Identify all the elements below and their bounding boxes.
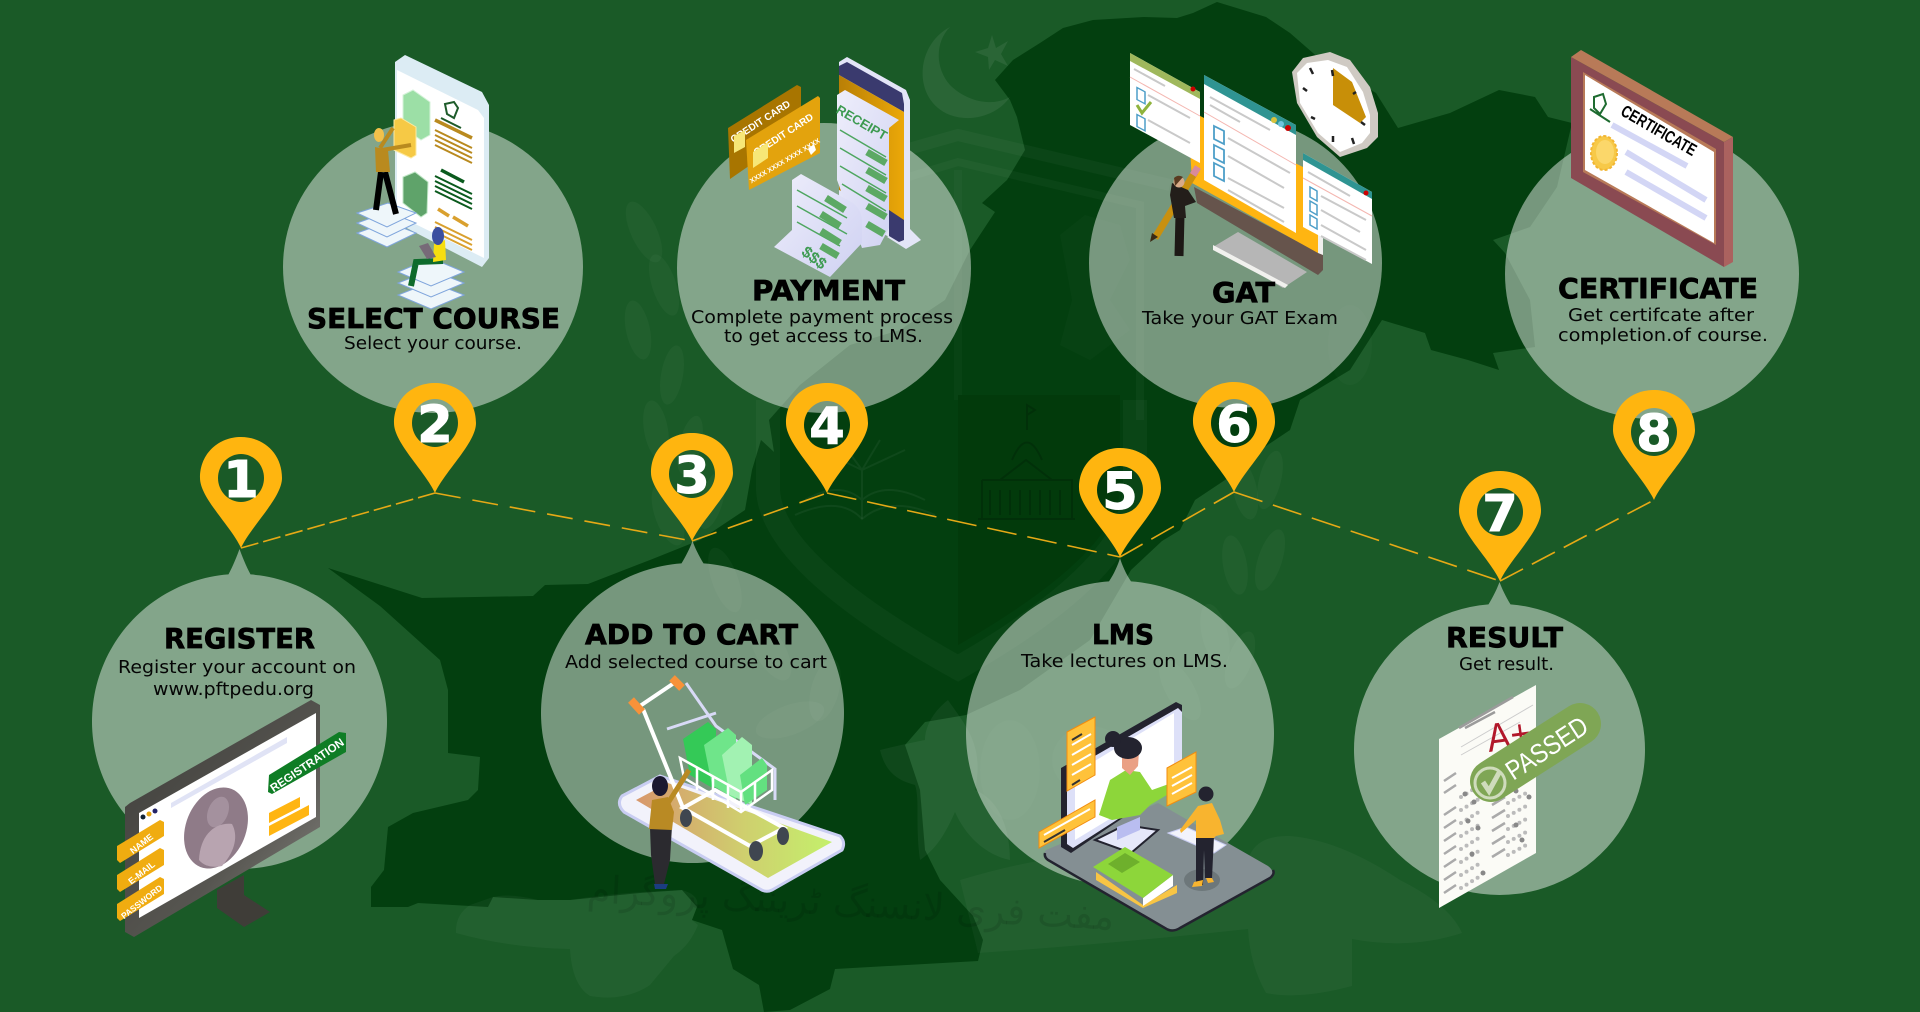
pencil bbox=[1150, 167, 1198, 242]
phone body bbox=[839, 57, 910, 243]
passed label: PASSED bbox=[1500, 711, 1594, 786]
woman pushing cart bbox=[649, 770, 689, 889]
pin 8 bbox=[1613, 390, 1695, 500]
illustration: LMS online lecture bbox=[1039, 702, 1274, 930]
background: faint seal, crescent and wreath bbox=[456, 27, 1462, 998]
standing man bbox=[374, 128, 411, 214]
frame top bevel bbox=[1571, 50, 1733, 142]
pin 4 bbox=[786, 383, 868, 493]
gold seal bbox=[1591, 136, 1617, 170]
A+ mark: A+ bbox=[1484, 711, 1534, 761]
heading: select course: SELECT COURSE bbox=[307, 302, 560, 335]
text: register description line 2: www.pftpedu.org bbox=[153, 679, 314, 700]
phone screen bbox=[397, 70, 484, 258]
heading: add to cart: ADD TO CART bbox=[585, 618, 798, 651]
illustration: framed certificate bbox=[1571, 50, 1733, 267]
pin 1 bbox=[200, 437, 282, 548]
front credit card bbox=[746, 96, 822, 190]
cart back wire bbox=[667, 683, 775, 800]
phone notch screen bbox=[839, 62, 904, 112]
Urdu watermark: مفت فری لانسنگ ٹریننگ پروگرام bbox=[586, 867, 1115, 940]
circle: select course bbox=[283, 121, 583, 413]
monitor frame bbox=[1061, 702, 1182, 853]
e-mail field bbox=[117, 848, 164, 892]
text: GAT description: Take your GAT Exam bbox=[1141, 308, 1338, 329]
cart lower tray bbox=[683, 790, 784, 846]
circle: LMS bbox=[966, 558, 1274, 886]
shield outline bbox=[768, 400, 1135, 668]
circle: GAT bbox=[1089, 118, 1382, 408]
illustration: phone with course catalogue bbox=[357, 55, 489, 309]
right exam window bbox=[1303, 153, 1372, 264]
password field: PASSWORD bbox=[119, 883, 164, 921]
monitor lavender bezel bbox=[1067, 708, 1182, 848]
text: certificate description line 2: completion.of course. bbox=[1558, 325, 1768, 346]
text: select course description: Select your course. bbox=[344, 333, 522, 354]
pin 2: 2 bbox=[417, 396, 453, 455]
college building line art bbox=[978, 405, 1075, 519]
lighter shapes in GAT circle bbox=[1060, 215, 1372, 385]
open book line art bbox=[795, 440, 935, 519]
inner frame bbox=[1583, 72, 1716, 245]
illustration: credit cards and receipts bbox=[728, 57, 921, 277]
green books bbox=[683, 722, 767, 805]
form bars bbox=[269, 797, 309, 836]
woman teacher bbox=[1099, 731, 1182, 820]
sheet header lines bbox=[1459, 697, 1533, 755]
platform dark lower edge bbox=[1045, 853, 1274, 930]
man's paper stack bbox=[357, 203, 416, 247]
right notes card bbox=[1167, 752, 1196, 806]
monitor amber screen bbox=[1188, 110, 1318, 253]
platform bbox=[1044, 803, 1273, 930]
wreath leaves, right column bbox=[980, 448, 1291, 820]
monitor body bbox=[125, 700, 320, 937]
pin 7: 7 bbox=[1482, 485, 1518, 544]
front credit card: XXXX XXXX XXXX XXXX bbox=[749, 138, 822, 185]
certificate text lines bbox=[1612, 125, 1706, 218]
standing man bbox=[1180, 786, 1224, 891]
papers bbox=[1168, 827, 1226, 853]
wheels bbox=[680, 809, 789, 861]
filled bubbles bbox=[1462, 788, 1532, 876]
orange text lines bbox=[435, 120, 472, 163]
tan text lines bbox=[435, 209, 472, 250]
front credit card: CREDIT CARD bbox=[752, 112, 816, 159]
text: LMS description: Take lectures on LMS. bbox=[1020, 651, 1228, 672]
flag star bbox=[975, 35, 1008, 70]
shield top bands bbox=[905, 135, 1170, 185]
back credit card: CREDIT CARD bbox=[729, 99, 793, 146]
phone screen amber bbox=[839, 75, 904, 222]
cart handle bbox=[631, 678, 683, 808]
window dots bbox=[140, 808, 158, 820]
pin 1: 1 bbox=[223, 451, 259, 510]
pin 6 bbox=[1193, 382, 1275, 492]
heading: certificate: CERTIFICATE bbox=[1558, 272, 1758, 305]
lower book bbox=[403, 172, 428, 217]
dashed route between the location pins bbox=[241, 492, 1654, 581]
circle: certificate bbox=[1505, 129, 1799, 419]
short curled receipt bbox=[774, 174, 862, 277]
monitor white edge bbox=[1318, 180, 1323, 255]
wreath leaves, left column bbox=[618, 197, 847, 746]
name field: NAME bbox=[128, 832, 155, 856]
text: result description: Get result. bbox=[1459, 654, 1554, 675]
text: certificate description line 1: Get certifcate after bbox=[1568, 305, 1755, 326]
monitor lower frame bbox=[1194, 187, 1323, 275]
shield right panel bbox=[958, 395, 1120, 645]
crest bbox=[1590, 94, 1610, 122]
illustration: registration monitor bbox=[117, 700, 347, 937]
text: register description line 1: Register your account on bbox=[118, 657, 356, 678]
phone body bbox=[619, 776, 844, 891]
short curled receipt: $$$ bbox=[798, 243, 830, 273]
text: add to cart description: Add selected course to cart bbox=[565, 652, 827, 673]
frame front bbox=[1571, 57, 1724, 267]
lower right pale watermark shape bbox=[960, 836, 1462, 995]
avatar bbox=[172, 778, 260, 878]
phone base bbox=[887, 224, 921, 249]
heading: result: RESULT bbox=[1446, 621, 1563, 654]
phone screen navy foot bbox=[889, 210, 904, 242]
long receipt: RECEIPT bbox=[834, 102, 890, 143]
pin 5 bbox=[1079, 448, 1161, 557]
frame side bevel bbox=[1724, 137, 1733, 267]
registration badge: REGISTRATION bbox=[269, 737, 347, 795]
pin 4: 4 bbox=[809, 398, 845, 457]
text: payment description line 1: Complete payment process bbox=[691, 307, 953, 328]
illustration: online exam monitor and clock bbox=[1130, 52, 1378, 288]
bottom notes card bbox=[1039, 800, 1095, 848]
long receipt bbox=[834, 90, 899, 248]
title bar line bbox=[171, 737, 287, 808]
pin 3: 3 bbox=[674, 447, 710, 506]
centre crossed leaf bbox=[880, 700, 1010, 860]
monitor screen bbox=[1075, 713, 1174, 840]
answer bubbles left bbox=[1461, 784, 1482, 888]
pin 2 bbox=[394, 383, 476, 493]
heading: LMS: LMS bbox=[1092, 618, 1154, 651]
monitor stand bbox=[1213, 232, 1307, 288]
woman's paper stack bbox=[398, 258, 464, 309]
monitor stand bbox=[217, 875, 270, 927]
wall clock bbox=[1292, 52, 1378, 157]
flag crescent bbox=[923, 27, 1010, 118]
heading: register: REGISTER bbox=[164, 622, 315, 655]
text: payment description line 2: to get access to LMS. bbox=[724, 326, 923, 347]
illustration: passed exam sheet bbox=[1439, 685, 1594, 908]
answer bubbles right bbox=[1508, 778, 1530, 855]
green books bbox=[1093, 847, 1177, 908]
stand column bbox=[1117, 817, 1140, 840]
monitor screen bbox=[139, 713, 316, 918]
centre exam window bbox=[1204, 75, 1296, 233]
back credit card bbox=[728, 85, 801, 179]
certificate paper bbox=[1585, 75, 1714, 243]
heading: payment: PAYMENT bbox=[752, 274, 905, 307]
circle: add to cart bbox=[541, 541, 844, 863]
pin 8: 8 bbox=[1636, 405, 1672, 464]
passed capsule bbox=[1491, 724, 1580, 781]
pin 6: 6 bbox=[1216, 396, 1252, 455]
passed check bbox=[1475, 768, 1505, 798]
background: dark map of Pakistan bbox=[328, 2, 1572, 1012]
pin 7 bbox=[1459, 471, 1541, 581]
circle: result bbox=[1354, 582, 1645, 895]
answer label lines left bbox=[1444, 773, 1456, 893]
left notes card bbox=[1067, 717, 1095, 791]
circle: register bbox=[92, 549, 387, 869]
pin 3 bbox=[651, 433, 733, 541]
stand lip bbox=[1213, 245, 1288, 288]
phone screen bbox=[636, 783, 832, 878]
heading: GAT: GAT bbox=[1212, 276, 1275, 309]
held book bbox=[394, 118, 416, 158]
crest bbox=[441, 102, 461, 128]
phone body bbox=[395, 55, 489, 267]
pin 5: 5 bbox=[1102, 463, 1138, 522]
lower left pale watermark shape bbox=[456, 890, 698, 998]
name field bbox=[117, 820, 164, 863]
e-mail field: E-MAIL bbox=[126, 859, 157, 886]
thinking man bbox=[1170, 176, 1196, 256]
illustration: shopping cart on phone bbox=[619, 678, 844, 891]
cart basket wires bbox=[680, 758, 772, 812]
sitting woman bbox=[411, 227, 446, 286]
answer sheet bbox=[1439, 685, 1536, 908]
upper book bbox=[403, 90, 430, 140]
monitor base bbox=[1095, 825, 1158, 853]
certificate title: CERTIFICATE bbox=[1618, 101, 1700, 160]
answer label lines right bbox=[1492, 797, 1505, 857]
green text lines bbox=[435, 170, 472, 209]
left exam window bbox=[1130, 53, 1200, 163]
circle: payment bbox=[677, 123, 971, 413]
